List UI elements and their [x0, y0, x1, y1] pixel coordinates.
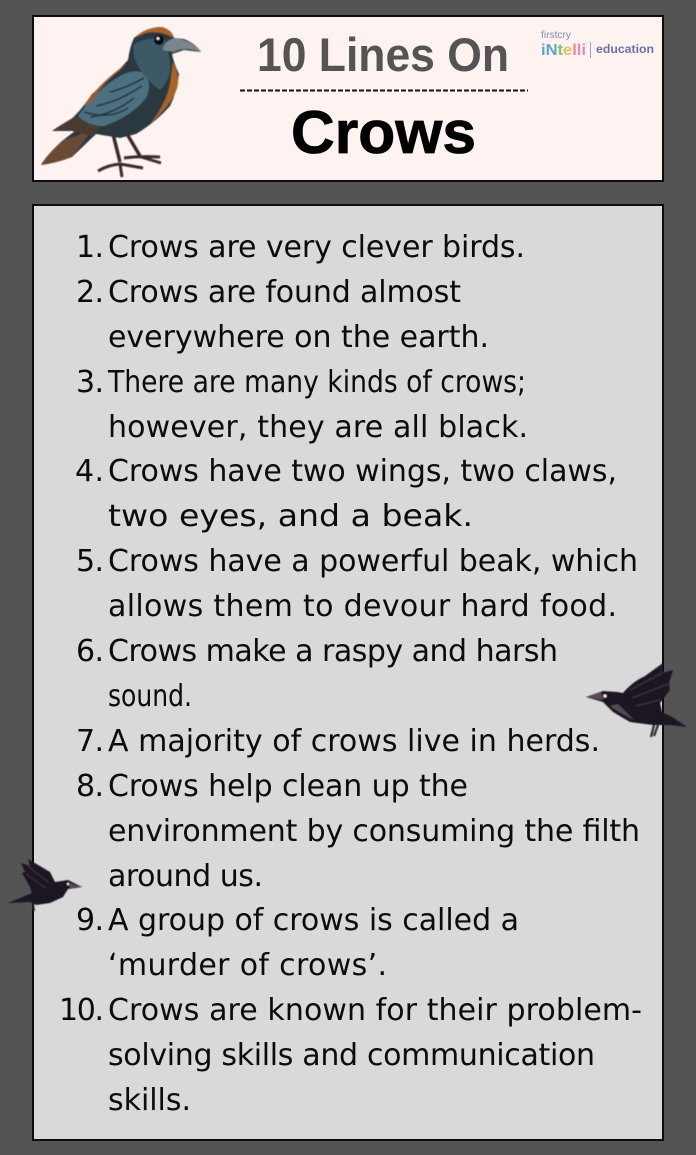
item 8: environment by consuming the filth: [108, 814, 640, 849]
item 10: [59, 993, 642, 1118]
item 10: skills.: [108, 1083, 191, 1118]
divider: dashed line: [240, 90, 528, 92]
item 6: sound.: [108, 679, 192, 714]
item 10: Crows are known for their problem-: [108, 993, 642, 1028]
item 5: 5.: [76, 544, 104, 579]
item 3: [76, 365, 528, 445]
item 10: 10.: [59, 993, 104, 1028]
list: ten lines about crows: [59, 230, 642, 1118]
item 2: 2.: [76, 275, 104, 310]
item 5: allows them to devour hard food.: [108, 589, 617, 624]
item 2: Crows are found almost: [108, 275, 461, 310]
icon: flying crow left: [8, 859, 82, 911]
heading: Crows: Crows: [291, 99, 476, 166]
item 1: Crows are very clever birds.: [108, 230, 525, 265]
item 1: 1.: [76, 230, 104, 265]
logo: firstcry intelli education: iNtelli: [541, 42, 586, 59]
icon: flying crow right: [586, 663, 687, 737]
item 6: 6.: [76, 634, 104, 669]
item 3: however, they are all black.: [108, 410, 528, 445]
item 9: 9.: [76, 903, 104, 938]
item 9: [76, 903, 519, 983]
item 7: 7.: [76, 724, 104, 759]
item 6: [76, 634, 558, 714]
logo: firstcry intelli education: firstcry: [541, 30, 571, 41]
item 8: around us.: [108, 859, 263, 894]
item 8: Crows help clean up the: [108, 769, 468, 804]
logo: firstcry intelli education: education: [596, 42, 654, 56]
item 3: 3.: [76, 365, 104, 400]
item 10: solving skills and communication: [108, 1038, 595, 1073]
item 2: [76, 275, 489, 355]
item 4: 4.: [75, 454, 104, 489]
item 5: Crows have a powerful beak, which: [108, 544, 638, 579]
item 3: There are many kinds of crows;: [107, 365, 526, 400]
item 4: Crows have two wings, two claws,: [108, 454, 617, 489]
item 2: everywhere on the earth.: [108, 320, 489, 355]
item 6: Crows make a raspy and harsh: [108, 634, 558, 669]
item 4: two eyes, and a beak.: [108, 499, 473, 534]
item 9: ‘murder of crows’.: [108, 948, 387, 983]
item 8: 8.: [76, 769, 104, 804]
item 8: [76, 769, 640, 894]
panel: header banner: [33, 16, 663, 181]
icon: perched crow: [41, 27, 201, 177]
item 5: [76, 544, 638, 624]
logo: firstcry intelli education: [541, 30, 654, 59]
item 9: A group of crows is called a: [108, 903, 519, 938]
heading: 10 Lines On: 10 Lines On: [257, 28, 509, 81]
item 7: A majority of crows live in herds.: [108, 724, 600, 759]
item 4: [75, 454, 617, 534]
panel: numbered facts: [33, 205, 663, 1140]
